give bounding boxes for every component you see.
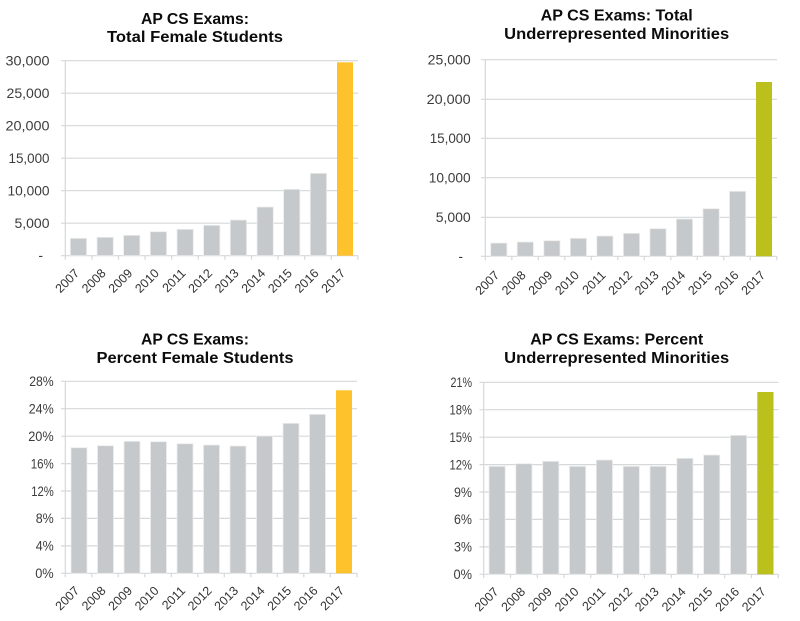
x axis labels: [473, 268, 768, 298]
x axis labels: 2007: [472, 585, 501, 614]
x axis labels: 2013: [212, 266, 242, 296]
x axis labels: 2013: [632, 268, 662, 298]
x axis labels: 2016: [712, 268, 742, 298]
x axis labels: 2009: [526, 268, 555, 298]
x axis labels: 2010: [132, 584, 162, 613]
bar chart: minority percent: [489, 392, 774, 574]
x axis labels: 2010: [552, 585, 582, 614]
x axis labels: 2017: [739, 585, 769, 614]
x axis labels: 2014: [238, 584, 268, 613]
x axis labels: 2007: [53, 266, 82, 296]
panel: percent underrepresented minorities: [450, 332, 778, 614]
x axis labels: 2012: [185, 584, 215, 613]
x axis labels: 2007: [53, 584, 82, 613]
y axis labels: 8%: [36, 510, 54, 526]
panel: percent female students: [28, 332, 357, 613]
y axis labels: 12%: [450, 456, 472, 472]
title: total female students: [107, 11, 283, 46]
x axis labels: 2007: [473, 268, 502, 298]
x axis labels: 2015: [265, 266, 295, 296]
title: percent underrepresented minorities: AP CS Exams: Percent: [530, 332, 704, 348]
x axis labels: 2010: [552, 268, 582, 298]
x axis labels: 2009: [525, 585, 555, 614]
x axis labels: 2011: [580, 268, 609, 297]
panel: total underrepresented minorities: [427, 8, 777, 298]
y axis labels: 5,000: [14, 215, 50, 231]
y axis labels: 9%: [454, 484, 472, 500]
y axis labels: [427, 52, 471, 264]
y axis labels: 20%: [28, 428, 54, 444]
title: percent female students: [96, 332, 294, 367]
x axis labels: 2014: [659, 268, 688, 298]
title: percent underrepresented minorities: [504, 332, 729, 367]
y axis labels: 30,000: [6, 52, 50, 68]
x axis labels: 2008: [499, 268, 529, 298]
bar chart: female percent: [71, 390, 352, 573]
title: total underrepresented minorities: [504, 8, 729, 43]
y axis labels: [6, 52, 50, 263]
y axis labels: 5,000: [436, 209, 471, 225]
title: percent female students: Percent Female Students: [96, 350, 294, 367]
x axis labels: 2008: [79, 584, 109, 613]
x axis labels: [53, 584, 347, 613]
title: total underrepresented minorities: AP CS Exams: Total: [541, 8, 693, 24]
x axis labels: 2015: [686, 585, 715, 614]
y axis labels: 0%: [454, 566, 472, 582]
y axis labels: [28, 373, 54, 581]
x axis labels: 2012: [186, 266, 215, 296]
y axis labels: 10,000: [429, 170, 471, 186]
x axis labels: 2012: [606, 585, 635, 614]
x axis labels: 2014: [659, 585, 689, 614]
y axis labels: 24%: [29, 400, 54, 416]
x axis labels: 2012: [606, 268, 635, 298]
x axis labels: 2011: [159, 584, 188, 613]
y axis labels: 20,000: [427, 91, 471, 107]
bar chart: minority totals: [491, 82, 772, 256]
x axis labels: 2011: [160, 266, 189, 295]
y axis labels: 0%: [35, 565, 54, 581]
x axis labels: 2010: [132, 266, 162, 296]
y axis labels: 15,000: [430, 130, 471, 146]
title: percent underrepresented minorities: Underrepresented Minorities: [504, 350, 729, 367]
y axis labels: 21%: [450, 374, 472, 390]
x axis labels: 2013: [632, 585, 662, 614]
x axis labels: [53, 266, 348, 296]
y axis labels: 25,000: [6, 85, 50, 101]
x axis labels: 2008: [499, 585, 528, 614]
bar chart: female totals: [70, 62, 353, 256]
x axis labels: 2016: [292, 266, 322, 296]
title: total female students: AP CS Exams:: [141, 11, 249, 28]
y axis labels: -: [458, 248, 463, 264]
y axis labels: [450, 374, 472, 582]
x axis labels: 2015: [265, 584, 294, 613]
x axis labels: 2017: [739, 268, 768, 298]
y axis labels: 15,000: [8, 150, 50, 166]
x axis labels: 2017: [319, 266, 348, 296]
y axis labels: 4%: [36, 538, 54, 554]
x axis labels: 2017: [318, 584, 347, 613]
title: total underrepresented minorities: Underrepresented Minorities: [504, 26, 729, 43]
x axis labels: 2011: [580, 585, 608, 614]
title: total female students: Total Female Students: [107, 29, 283, 46]
y axis labels: 10,000: [8, 182, 50, 198]
x axis labels: 2008: [79, 266, 109, 296]
x axis labels: 2014: [239, 266, 268, 296]
y axis labels: 16%: [31, 456, 54, 472]
y axis labels: -: [38, 247, 43, 263]
y axis labels: 20,000: [6, 118, 50, 134]
x axis labels: 2016: [291, 584, 321, 613]
x axis labels: 2009: [106, 584, 135, 613]
y axis labels: 18%: [450, 402, 472, 418]
x axis labels: [472, 585, 769, 614]
y axis labels: 12%: [31, 483, 54, 499]
y axis labels: 25,000: [428, 52, 471, 68]
title: percent female students: AP CS Exams:: [141, 332, 249, 348]
y axis labels: 3%: [454, 538, 472, 554]
x axis labels: 2015: [685, 268, 715, 298]
x axis labels: 2013: [212, 584, 241, 613]
panel: total female students: [6, 11, 358, 296]
y axis labels: 6%: [454, 511, 472, 527]
y axis labels: 15%: [450, 429, 472, 445]
x axis labels: 2016: [713, 585, 742, 614]
x axis labels: 2009: [106, 266, 135, 296]
y axis labels: 28%: [29, 373, 54, 389]
